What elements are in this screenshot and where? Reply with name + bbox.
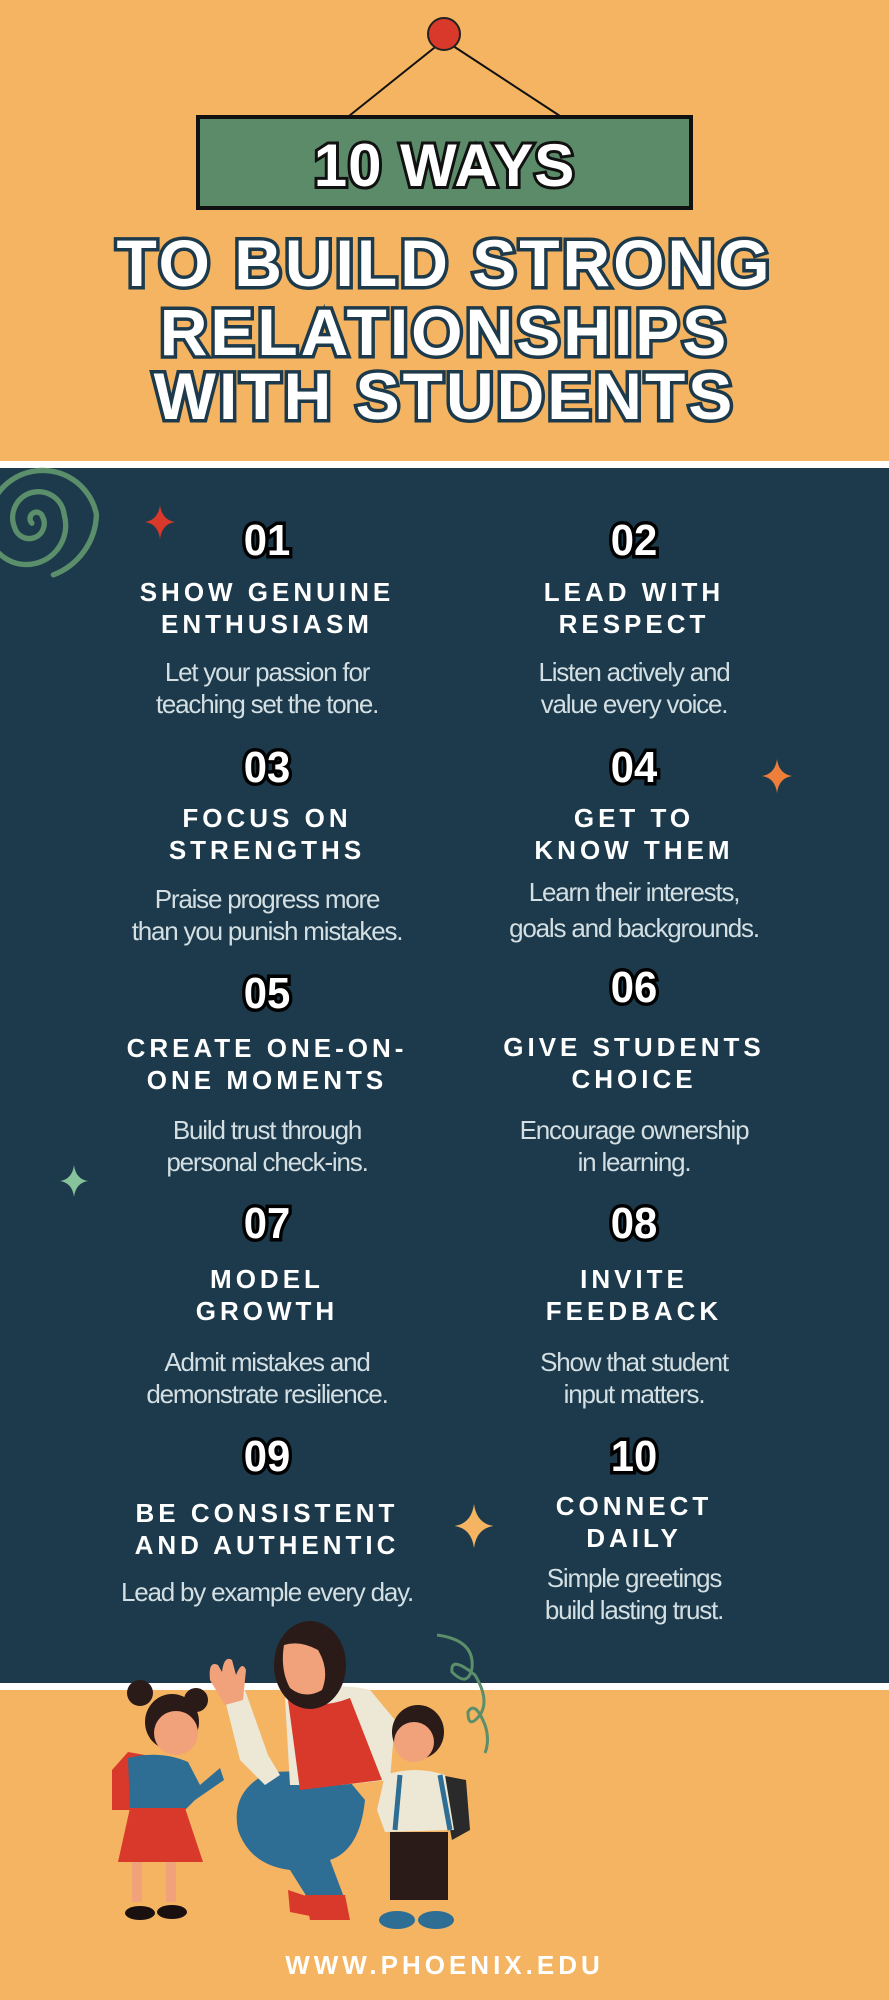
item 08: input matters.: [564, 1379, 704, 1409]
teacher torso: [285, 1686, 395, 1785]
item 06: 06: [611, 963, 657, 1012]
item 10: [545, 1432, 723, 1625]
item 10: 10: [611, 1432, 657, 1481]
item 06: Encourage ownership: [520, 1115, 748, 1145]
teacher arm raised: [225, 1690, 280, 1785]
item 03: Praise progress more: [155, 884, 379, 914]
teacher head: [274, 1621, 346, 1709]
item 07: demonstrate resilience.: [146, 1379, 388, 1409]
item 10: CONNECT: [556, 1491, 712, 1521]
item 08: INVITE: [580, 1264, 688, 1294]
item 09: 09: [244, 1432, 290, 1481]
item 03: 03: [244, 743, 290, 792]
illustration: teacher with students: [112, 1621, 489, 1929]
item 07: 07: [244, 1199, 290, 1248]
item 09: Lead by example every day.: [121, 1577, 413, 1607]
item 07: GROWTH: [196, 1296, 338, 1326]
item 03: FOCUS ON: [182, 803, 352, 833]
item 01: Let your passion for: [165, 657, 369, 687]
header: hanging sign: [196, 17, 693, 210]
item 05: [127, 969, 407, 1177]
item 07: Admit mistakes and: [164, 1347, 370, 1377]
item 06: [503, 963, 765, 1177]
item 01: SHOW GENUINE: [140, 577, 394, 607]
item 02: LEAD WITH: [544, 577, 724, 607]
item 04: goals and backgrounds.: [509, 913, 759, 943]
item 02: value every voice.: [541, 689, 727, 719]
item 05: Build trust through: [173, 1115, 361, 1145]
icon: orange sparkle: [762, 759, 792, 793]
item 10: DAILY: [586, 1523, 682, 1553]
boy: [440, 1775, 470, 1840]
footer URL: WWW.PHOENIX.EDU: [285, 1950, 604, 1980]
item 08: FEEDBACK: [546, 1296, 722, 1326]
girl: [127, 1680, 153, 1706]
item 03: than you punish mistakes.: [132, 916, 402, 946]
item 05: ONE MOMENTS: [147, 1065, 387, 1095]
item 02: Listen actively and: [538, 657, 730, 687]
squiggle: [437, 1635, 488, 1753]
title: WITH STUDENTS: [154, 359, 735, 433]
item 05: CREATE ONE-ON-: [127, 1033, 407, 1063]
icon: green sparkle: [60, 1166, 88, 1196]
item 04: GET TO: [574, 803, 694, 833]
item 03: STRENGTHS: [169, 835, 365, 865]
item 06: GIVE STUDENTS: [503, 1032, 765, 1062]
item 07: [146, 1199, 388, 1409]
item 08: 08: [611, 1199, 657, 1248]
title: [114, 226, 773, 433]
item 04: [509, 743, 759, 943]
item 04: 04: [611, 743, 657, 792]
title: TO BUILD STRONG: [116, 226, 773, 300]
item 10: Simple greetings: [547, 1563, 721, 1593]
panel: dark list area: [0, 461, 889, 1690]
item 01: ENTHUSIASM: [161, 609, 373, 639]
item 10: build lasting trust.: [545, 1595, 723, 1625]
teacher legs: [237, 1770, 365, 1905]
icon: yellow sparkle: [454, 1504, 494, 1548]
item 01: teaching set the tone.: [156, 689, 378, 719]
sign text: 10 WAYS: [314, 132, 575, 199]
item 08: [540, 1199, 729, 1409]
item 09: [121, 1432, 413, 1607]
title: RELATIONSHIPS: [160, 295, 729, 369]
item 02: 02: [611, 516, 657, 565]
icon: spiral: [0, 468, 100, 578]
item 01: [140, 516, 394, 719]
item 04: KNOW THEM: [534, 835, 734, 865]
item 01: 01: [244, 516, 290, 565]
item 07: MODEL: [210, 1264, 324, 1294]
item 09: AND AUTHENTIC: [135, 1530, 399, 1560]
icon: red sparkle: [145, 505, 175, 539]
item 04: Learn their interests,: [529, 877, 739, 907]
item 08: Show that student: [540, 1347, 728, 1377]
item 02: RESPECT: [559, 609, 709, 639]
item 02: [538, 516, 730, 719]
item 05: 05: [244, 969, 290, 1018]
item 03: [132, 743, 402, 946]
item 06: CHOICE: [571, 1064, 697, 1094]
item 06: in learning.: [578, 1147, 690, 1177]
item 05: personal check-ins.: [166, 1147, 368, 1177]
item 09: BE CONSISTENT: [136, 1498, 398, 1528]
